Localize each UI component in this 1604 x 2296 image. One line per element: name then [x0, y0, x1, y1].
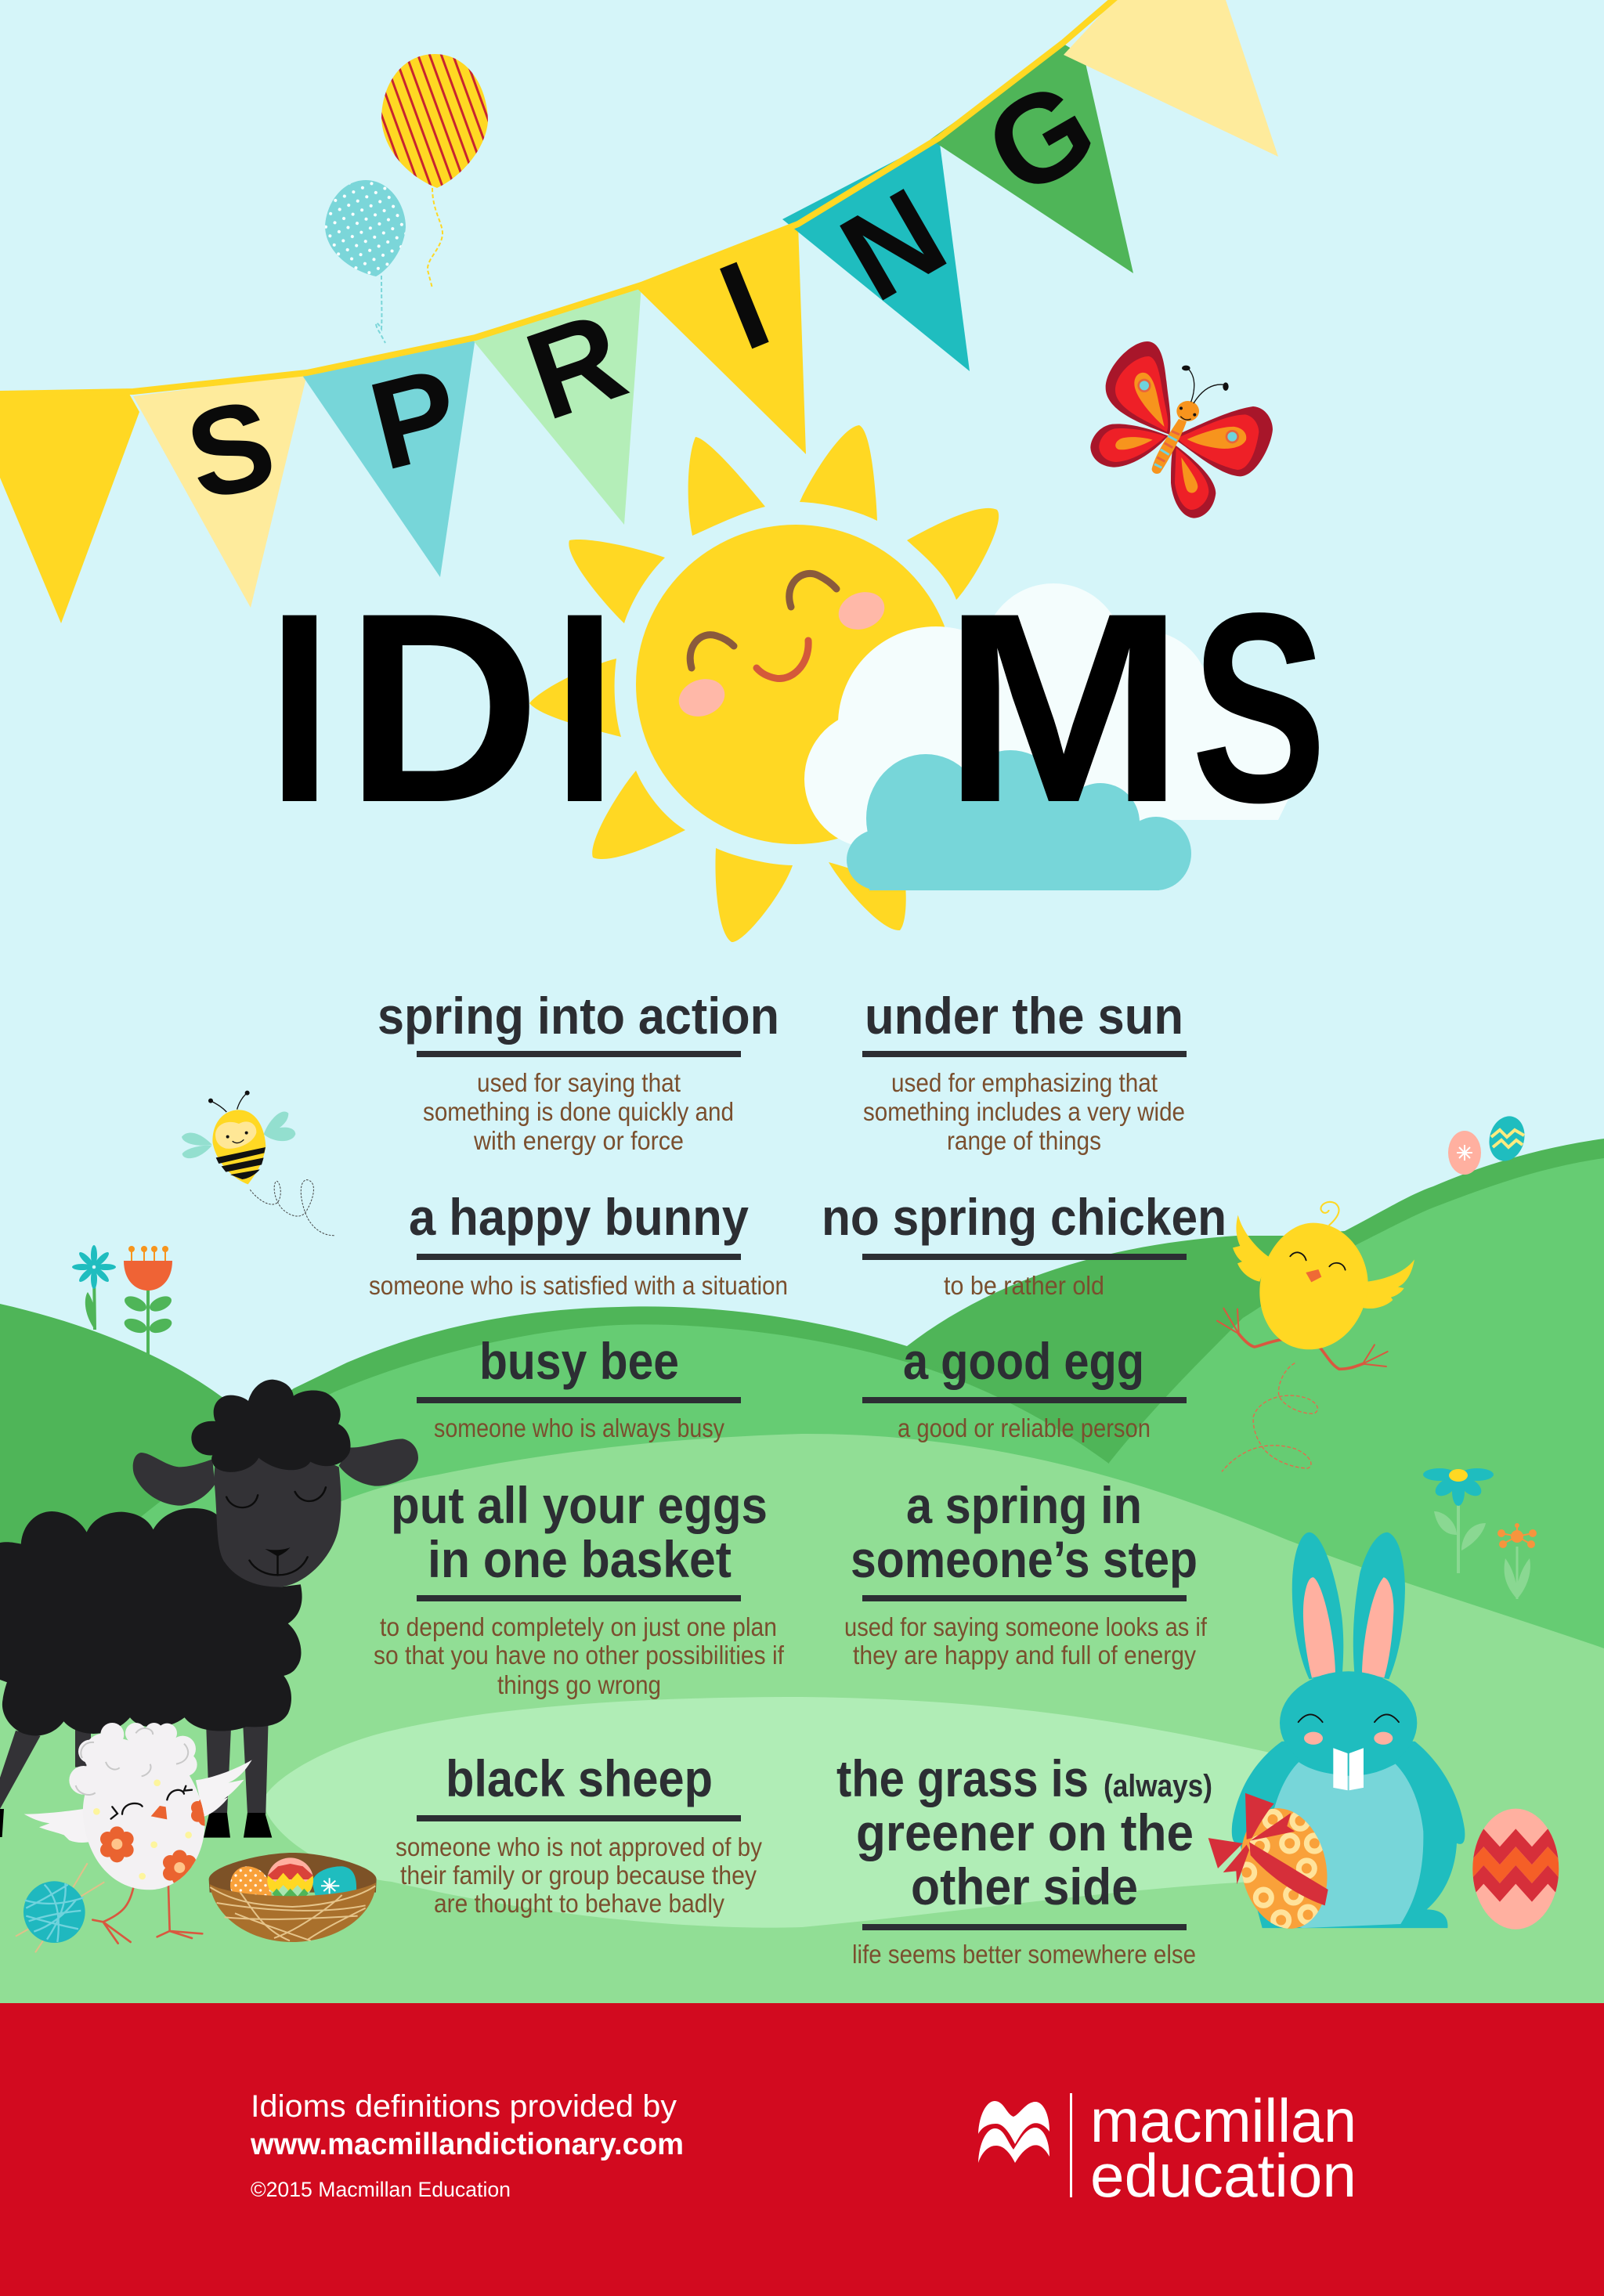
bunny head: [1280, 1671, 1417, 1774]
sheep head: [214, 1441, 341, 1587]
balloons: [325, 54, 488, 343]
idiom: a good egg: [862, 1332, 1187, 1442]
flag N: N: [818, 161, 967, 327]
chick wings: [1233, 1215, 1269, 1282]
chick wings: [24, 1809, 92, 1843]
idiom: a good egg: a good egg: [903, 1332, 1144, 1390]
idiom: put all your eggs in one basket: in one basket: [428, 1530, 732, 1588]
logo divider: [1070, 2093, 1072, 2197]
idiom: a spring in someone's step: used for saying someone looks as if: [844, 1612, 1208, 1641]
idiom: under the sun: something includes a very wide: [863, 1097, 1185, 1126]
logo icon: open book: [978, 2101, 1049, 2163]
flag G: [930, 44, 1133, 273]
white cloud: [804, 583, 1300, 848]
bunting with SPRING letters: [0, 0, 1278, 623]
left flowers: [72, 1245, 174, 1355]
eggs on the hill: [1448, 1112, 1530, 1175]
idiom: the grass is always greener on the other side: the grass is: [836, 1749, 1089, 1807]
bunny egg: [1208, 1793, 1328, 1929]
idiom: put all your eggs in one basket: to depend completely on just one plan: [380, 1612, 777, 1641]
idiom: the grass is always greener on the other side: life seems better somewhere else: [852, 1940, 1196, 1969]
idiom: black sheep: are thought to behave badly: [434, 1889, 724, 1918]
chick trail: [1222, 1363, 1317, 1471]
flag G: G: [963, 52, 1118, 223]
bunny face: [1299, 1714, 1399, 1790]
title IDIOMS: I: [267, 558, 332, 859]
title IDIOMS: [267, 558, 1327, 859]
butterfly: [1090, 341, 1273, 518]
flag blank pale: [1064, 0, 1278, 157]
teal flower: [72, 1245, 116, 1330]
chick body: [1259, 1223, 1368, 1349]
idiom: a spring in someone's step: [844, 1476, 1208, 1670]
sun disc: [636, 525, 956, 844]
flag S: S: [175, 372, 286, 526]
egg ribbon: [1208, 1793, 1328, 1905]
right flowers: [1423, 1468, 1537, 1599]
blue bunny: [1208, 1532, 1564, 1937]
sun rays: [529, 425, 999, 942]
sun cheeks: [674, 586, 890, 723]
chick fleece: [69, 1723, 197, 1801]
idiom: a happy bunny: someone who is satisfied with a situation: [369, 1271, 788, 1300]
bunny ears: [1292, 1532, 1405, 1679]
sun: [529, 425, 999, 942]
idiom: no spring chicken: no spring chicken: [822, 1188, 1226, 1246]
title IDIOMS: S: [1191, 558, 1327, 859]
nest with eggs: [209, 1853, 377, 1942]
logo: macmillan education: education: [1090, 2141, 1357, 2210]
sheep face: [226, 1487, 326, 1576]
teal cloud: [847, 750, 1191, 890]
teal meadow flower: [1423, 1468, 1494, 1573]
logo: macmillan education: [978, 2086, 1357, 2210]
sheep ears: [133, 1439, 418, 1506]
idiom: the grass is always greener on the other side: other side: [911, 1857, 1138, 1915]
idiom: put all your eggs in one basket: so that you have no other possibilities if: [374, 1641, 785, 1670]
footer credit: ©2015 Macmillan Education: [251, 2178, 511, 2201]
rolling green hills: [0, 1139, 1604, 2004]
teal zigzag egg: [1484, 1112, 1530, 1165]
idiom: busy bee: someone who is always busy: [434, 1413, 724, 1442]
chick face: [1290, 1252, 1346, 1270]
flag S: [0, 372, 307, 623]
idiom: a happy bunny: a happy bunny: [409, 1188, 749, 1246]
chick body: [83, 1744, 205, 1890]
idiom: a good egg: a good or reliable person: [898, 1413, 1151, 1442]
idiom: spring into action: with energy or force: [473, 1126, 684, 1155]
idiom: put all your eggs in one basket: things go wrong: [497, 1670, 661, 1699]
bee trail: [250, 1180, 335, 1236]
yellow chick: [1217, 1202, 1414, 1471]
idiom: put all your eggs in one basket: [374, 1476, 785, 1699]
bunny body: [1232, 1742, 1465, 1928]
idiom: spring into action: something is done quickly and: [423, 1097, 734, 1126]
flag R: R: [510, 284, 641, 446]
flag P: [302, 338, 475, 577]
idiom: the grass is always greener on the other side: (always): [1104, 1769, 1212, 1803]
idioms right column: [822, 987, 1226, 1969]
idiom: black sheep: their family or group because they: [400, 1861, 757, 1890]
idiom: black sheep: black sheep: [446, 1749, 713, 1807]
pink zigzag egg: [1472, 1809, 1559, 1930]
chick curl: [1320, 1202, 1339, 1226]
pink egg: [1448, 1131, 1481, 1175]
flag N: [782, 138, 970, 371]
logo wordmark: macmillan: [1090, 2086, 1357, 2155]
yarn ball: [16, 1863, 104, 1952]
idiom: put all your eggs in one basket: put all your eggs: [391, 1476, 768, 1534]
title IDIOMS: D: [345, 558, 540, 859]
idiom: under the sun: used for emphasizing that: [891, 1068, 1158, 1097]
nest eggs: [230, 1857, 357, 1897]
sheep fleece top: [191, 1380, 351, 1472]
chick legs: [1217, 1309, 1388, 1369]
idiom: a happy bunny: [369, 1188, 788, 1300]
idioms left column: [369, 987, 788, 1918]
footer credit: [250, 2089, 684, 2201]
white chick with yarn and nest: [16, 1723, 377, 1952]
footer credit: www.macmillandictionary.com: [250, 2128, 684, 2161]
chick legs: [92, 1886, 202, 1944]
yellow striped balloon: [381, 54, 488, 288]
bee: [182, 1091, 335, 1236]
idiom: the grass is always greener on the other side: [836, 1749, 1212, 1969]
orange meadow flower: [1497, 1523, 1537, 1599]
idiom: no spring chicken: to be rather old: [944, 1271, 1104, 1300]
footer band: [0, 2003, 1604, 2296]
idiom: black sheep: someone who is not approved of by: [396, 1832, 762, 1861]
flag I: I: [702, 233, 786, 377]
flag P: P: [357, 340, 472, 496]
chick face: [111, 1786, 192, 1819]
teal dotted balloon: [325, 180, 406, 343]
idiom: a spring in someone's step: someone’s step: [851, 1530, 1198, 1588]
chick flowers: [100, 1800, 205, 1883]
sheep wool body: [0, 1508, 302, 1735]
sun face: [690, 573, 836, 679]
idiom: a spring in someone's step: a spring in: [906, 1476, 1142, 1534]
idiom: no spring chicken: [822, 1188, 1226, 1300]
idiom: spring into action: used for saying that: [477, 1068, 681, 1097]
idiom: busy bee: busy bee: [479, 1332, 679, 1390]
idiom: under the sun: range of things: [947, 1126, 1101, 1155]
bunny belly: [1267, 1762, 1423, 1928]
idiom: the grass is always greener on the other side: greener on the: [856, 1803, 1194, 1861]
idiom: under the sun: [862, 987, 1187, 1155]
flag R: [471, 284, 641, 525]
black sheep: [0, 1380, 418, 1735]
idiom: black sheep: [396, 1749, 762, 1918]
idiom: under the sun: under the sun: [865, 987, 1183, 1045]
bee body: [213, 1110, 266, 1184]
bee wings: [182, 1111, 295, 1158]
footer credit: Idioms definitions provided by: [251, 2089, 677, 2124]
flag I: [634, 224, 806, 454]
idiom: busy bee: [417, 1332, 741, 1442]
idiom: a spring in someone's step: they are happy and full of energy: [853, 1641, 1196, 1670]
orange flower: [122, 1246, 174, 1355]
idiom: spring into action: spring into action: [378, 987, 779, 1045]
title IDIOMS: I: [552, 558, 617, 859]
sheep legs: [0, 1720, 272, 1838]
title IDIOMS: M: [942, 558, 1185, 859]
bunting string: [0, 0, 1120, 394]
idiom: spring into action: [378, 987, 779, 1155]
